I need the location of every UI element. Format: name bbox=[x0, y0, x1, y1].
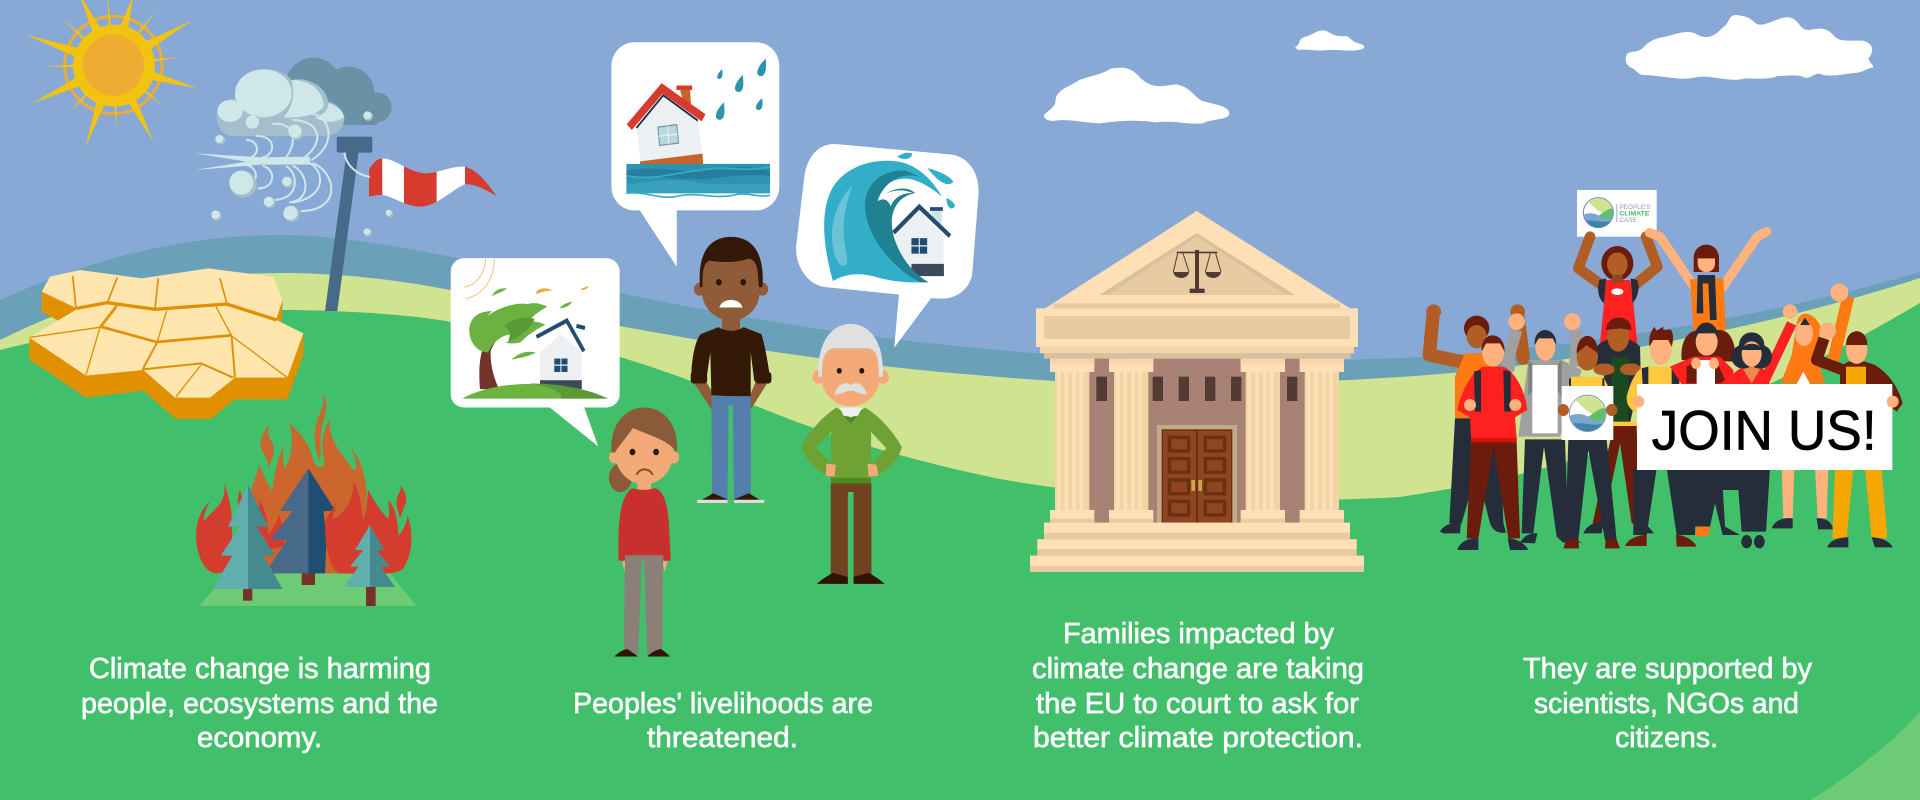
person: man with dark skin bbox=[691, 237, 771, 503]
dark back cloud bbox=[285, 58, 392, 125]
windsock pole bbox=[325, 137, 372, 311]
JOIN US sign bbox=[1632, 372, 1899, 470]
icon: cracked dry land bbox=[29, 268, 303, 419]
text: livelihoods threatened: threatened. bbox=[647, 722, 798, 754]
text: livelihoods threatened: Peoples' livelihoods are bbox=[573, 688, 873, 720]
raised sign with logo bbox=[1577, 190, 1657, 237]
woman in red on shoulders bbox=[1578, 237, 1657, 343]
man in grey jacket bbox=[1507, 313, 1582, 543]
steps bbox=[1030, 523, 1364, 572]
man in yellow sweater bbox=[1625, 327, 1697, 547]
courthouse bbox=[1030, 211, 1364, 572]
icon: storm with wind and windsock bbox=[195, 58, 498, 311]
icon: sun bbox=[24, 0, 199, 149]
woman in orange on shoulders bbox=[1649, 232, 1767, 330]
person: girl bbox=[609, 408, 679, 657]
landscape hills bbox=[0, 235, 1920, 800]
text: livelihoods threatened bbox=[573, 688, 873, 754]
text: supporters: citizens. bbox=[1615, 722, 1718, 754]
wind swirls bbox=[247, 113, 369, 211]
woman with logo sign bbox=[1558, 336, 1620, 548]
windsock bbox=[369, 158, 496, 207]
raised sign with logo: CASE bbox=[1619, 217, 1637, 224]
woman with curly hair and raised arm bbox=[1718, 304, 1797, 548]
right tree bbox=[344, 525, 395, 606]
speech bubble: tsunami house bbox=[796, 144, 979, 348]
person: older man bbox=[801, 324, 902, 584]
text: climate change harming bbox=[81, 653, 438, 754]
orange flames bbox=[250, 392, 367, 573]
text: families taking EU to court: Families impacted by bbox=[1063, 618, 1334, 650]
pediment bbox=[1045, 211, 1350, 309]
red flames bbox=[196, 478, 411, 573]
hail stones bbox=[211, 111, 393, 237]
woman with pigtails bbox=[1670, 322, 1740, 536]
clouds bbox=[1044, 15, 1873, 124]
text: supporters: They are supported by bbox=[1523, 653, 1812, 685]
text: climate change harming: Climate change is harming bbox=[89, 653, 431, 685]
door bbox=[1157, 425, 1237, 523]
entablature bbox=[1036, 308, 1358, 359]
man with raised fists, back left bbox=[1426, 304, 1525, 533]
JOIN US sign: JOIN US! bbox=[1652, 399, 1877, 461]
light front cloud bbox=[217, 69, 344, 136]
crowd of supporters bbox=[1426, 190, 1903, 550]
left tree bbox=[213, 485, 283, 601]
person in orange hoodie bbox=[1772, 284, 1848, 529]
text: families taking EU to court: better climate protection. bbox=[1033, 722, 1363, 754]
text: families taking EU to court: the EU to court to ask for bbox=[1036, 688, 1359, 720]
centre tree bbox=[265, 468, 363, 585]
raised sign with logo: PEOPLE'S bbox=[1619, 204, 1651, 211]
text: supporters bbox=[1523, 653, 1812, 754]
man with green shirt carrying woman bbox=[1583, 317, 1654, 533]
speech bubble: flooded house bbox=[611, 42, 779, 267]
text: families taking EU to court bbox=[1032, 618, 1364, 754]
back wall and windows bbox=[1089, 359, 1305, 523]
columns bbox=[1050, 359, 1344, 523]
text: climate change harming: economy. bbox=[197, 722, 322, 754]
speech bubble: storm house bbox=[451, 258, 620, 446]
man in brown jacket bbox=[1817, 322, 1903, 547]
text: supporters: scientists, NGOs and bbox=[1534, 688, 1799, 720]
text: families taking EU to court: climate change are taking bbox=[1032, 653, 1364, 685]
raised sign with logo: CLIMATE bbox=[1619, 211, 1650, 218]
tree bbox=[479, 316, 526, 389]
icon: scales of justice bbox=[1173, 250, 1221, 293]
icon: forest fire bbox=[196, 392, 417, 606]
people and speech bubbles bbox=[451, 42, 979, 657]
man in red sweater with backpack bbox=[1457, 335, 1528, 550]
house bbox=[540, 334, 582, 382]
text: climate change harming: people, ecosystems and the bbox=[81, 688, 438, 720]
